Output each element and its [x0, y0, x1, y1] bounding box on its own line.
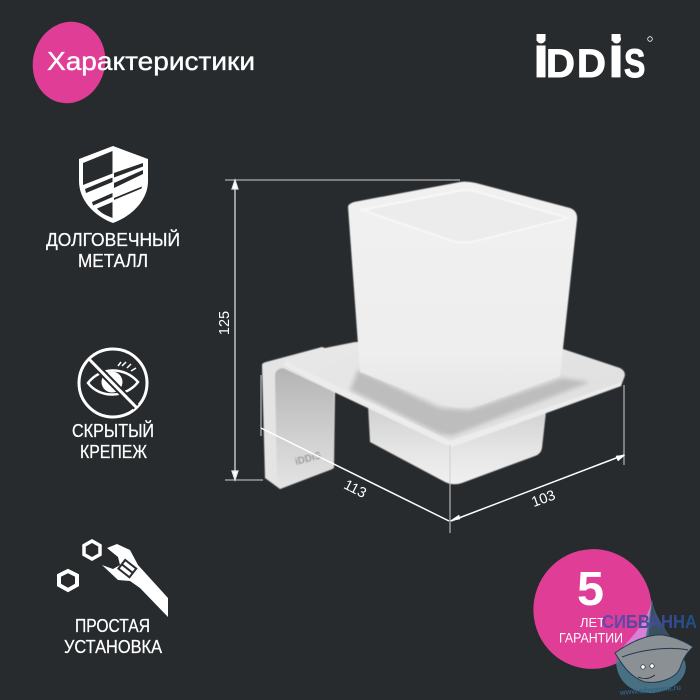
label: ПРОСТАЯ	[75, 616, 150, 636]
label: 103: 103	[530, 488, 558, 511]
text: ЛЕТ	[580, 615, 605, 630]
feature: hidden fastening	[72, 349, 154, 462]
heading pink blob	[24, 14, 114, 111]
logo: iDDiS	[533, 25, 652, 90]
warranty badge: ГАРАНТИИ	[559, 630, 623, 646]
dimension 103	[450, 455, 625, 521]
wall mount	[262, 347, 335, 489]
feature: durable metal: МЕТАЛЛ	[78, 251, 148, 271]
dimension 113	[261, 428, 449, 521]
badge pink blob	[517, 532, 668, 686]
extension lines	[225, 180, 624, 533]
dimensions	[225, 180, 625, 533]
tub face	[638, 664, 655, 679]
shelf plate	[283, 342, 625, 447]
heading text: Характеристики	[47, 46, 255, 76]
product: cup holder	[262, 182, 625, 489]
mount front face	[275, 368, 334, 489]
icon: nuts and wrench	[59, 541, 168, 617]
cup shadow on plate	[350, 370, 590, 436]
plate front edge	[283, 362, 622, 447]
heading: Характеристики	[24, 14, 255, 111]
logo on mount: iDDiS	[294, 450, 323, 468]
logo: iDDiS: D	[546, 42, 575, 86]
logo: iDDiS: D	[577, 42, 606, 86]
logo: iDDiS: i	[533, 25, 549, 90]
water drop	[616, 600, 686, 693]
drop highlight	[618, 600, 652, 652]
cup rim	[362, 190, 568, 242]
logo: iDDiS: i	[608, 25, 624, 90]
feature: hidden fastening: КРЕПЕЖ	[80, 442, 147, 462]
icon: crossed-out eye	[79, 349, 147, 417]
label: 113: 113	[341, 477, 369, 502]
tub rim line	[622, 648, 688, 657]
warranty badge	[517, 532, 668, 686]
feature: easy installation	[59, 541, 168, 657]
label: СКРЫТЫЙ	[72, 420, 154, 441]
watermark: Sibvanna	[602, 600, 697, 697]
lower cup	[368, 405, 546, 484]
bathtub	[615, 635, 693, 682]
feature: easy installation: УСТАНОВКА	[64, 637, 162, 657]
url text: www.sibvanna.ru	[618, 683, 682, 697]
label: ДОЛГОВЕЧНЫЙ	[46, 229, 180, 250]
glass cup	[348, 182, 577, 408]
logo: iDDiS: S	[624, 41, 645, 86]
label: 125: 125	[217, 311, 233, 335]
feature: durable metal	[46, 146, 180, 271]
dimension 125	[232, 180, 238, 480]
number 5: 5	[577, 563, 604, 616]
icon: shield	[79, 146, 148, 223]
